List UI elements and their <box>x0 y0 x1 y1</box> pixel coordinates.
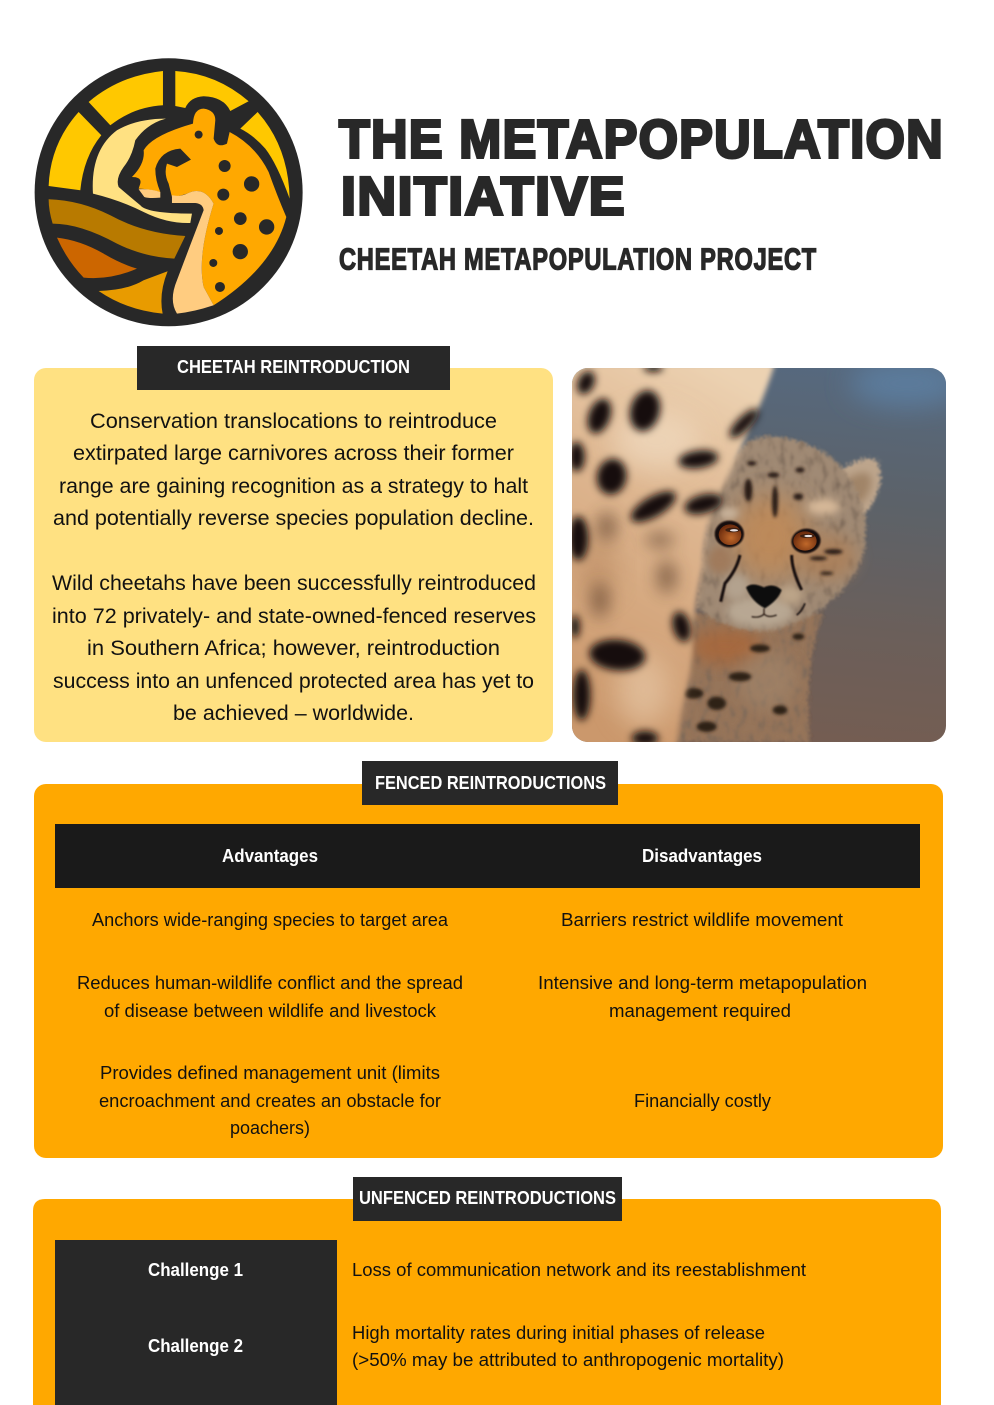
challenge labels: Challenge 2 <box>148 1336 243 1356</box>
heading: fenced reintroductions <box>362 761 618 805</box>
tear lines and nose <box>721 555 805 617</box>
text block: introduction: range are gaining recognition as a strategy to halt <box>59 474 528 498</box>
challenge descriptions <box>352 1260 806 1370</box>
text block: introduction: in Southern Africa; however, reintroduction <box>87 636 500 660</box>
text block: introduction: be achieved – worldwide. <box>173 701 414 725</box>
text block: introduction: success into an unfenced protected area has yet to <box>53 669 534 693</box>
advantages column <box>77 910 463 1138</box>
challenge descriptions: High mortality rates during initial phases of release <box>352 1323 765 1343</box>
logo: cheetah emblem <box>35 58 303 326</box>
text block: introduction: into 72 privately- and state-owned-fenced reserves <box>52 604 536 628</box>
advantages column: encroachment and creates an obstacle for <box>99 1091 441 1111</box>
adult flank <box>567 363 775 747</box>
disadvantages column: Financially costly <box>634 1091 771 1111</box>
cub head <box>697 437 866 630</box>
text block: introduction: Wild cheetahs have been successfully reintroduced <box>52 571 536 595</box>
heading: fenced reintroductions: FENCED REINTRODUCTIONS <box>375 773 606 793</box>
heading: unfenced reintroductions <box>353 1177 622 1221</box>
cub ear <box>835 458 881 515</box>
challenge descriptions: Loss of communication network and its reestablishment <box>352 1260 806 1280</box>
heading: cheetah reintroduction <box>137 346 450 390</box>
panel: unfenced reintroductions <box>33 1177 941 1405</box>
disadvantages column <box>538 910 867 1111</box>
panel: fenced reintroductions <box>34 761 943 1158</box>
title <box>339 110 944 226</box>
text block: introduction: and potentially reverse species population decline. <box>53 506 534 530</box>
advantages column: Reduces human-wildlife conflict and the spread <box>77 973 463 993</box>
advantages column: Anchors wide-ranging species to target area <box>92 910 449 930</box>
title: INITIATIVE <box>341 166 626 226</box>
disadvantages column: Barriers restrict wildlife movement <box>561 910 843 930</box>
heading: cheetah reintroduction: CHEETAH REINTRODUCTION <box>177 357 410 377</box>
panel: cheetah reintroduction <box>34 346 553 742</box>
text block: introduction: Conservation translocations to reintroduce <box>90 409 497 433</box>
advantages column: of disease between wildlife and livestock <box>104 1001 437 1021</box>
heading: unfenced reintroductions: UNFENCED REINTRODUCTIONS <box>359 1188 616 1208</box>
text block: introduction <box>52 409 536 725</box>
disadvantages column: Intensive and long-term metapopulation <box>538 973 867 993</box>
table header: Advantages <box>222 846 318 866</box>
table header <box>55 824 920 888</box>
table header: Disadvantages <box>642 846 762 866</box>
text block: introduction: extirpated large carnivores across their former <box>73 441 514 465</box>
title: THE METAPOPULATION <box>339 110 944 170</box>
disadvantages column: management required <box>609 1001 791 1021</box>
challenge labels: Challenge 1 <box>148 1260 243 1280</box>
challenge labels <box>55 1240 337 1405</box>
advantages column: Provides defined management unit (limits <box>100 1063 440 1083</box>
cub eyes <box>715 521 822 555</box>
subtitle: CHEETAH METAPOPULATION PROJECT <box>339 242 817 276</box>
photo: cheetah cub peering around adult <box>567 360 963 747</box>
cub neck and chest <box>673 613 823 742</box>
advantages column: poachers) <box>230 1118 310 1138</box>
challenge descriptions: (>50% may be attributed to anthropogenic mortality) <box>352 1350 784 1370</box>
